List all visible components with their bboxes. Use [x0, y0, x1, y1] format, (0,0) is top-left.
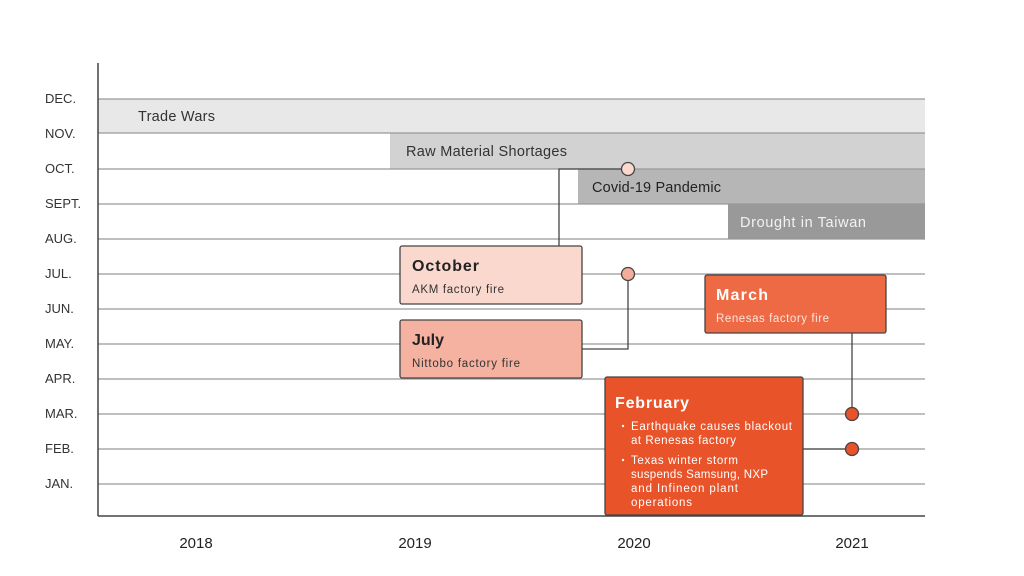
callout: March: Renesas factory fire [716, 313, 829, 325]
callout: February: operations [631, 497, 692, 509]
callout: July: July [412, 332, 444, 349]
bar: Drought in Taiwan: Drought in Taiwan [740, 215, 866, 231]
month axis labels: MAY. [45, 336, 74, 351]
year labels: 2020 [617, 535, 651, 552]
callout: October: October [412, 258, 479, 275]
marker: February [846, 442, 858, 456]
month axis labels: AUG. [45, 231, 77, 246]
connector: March [851, 333, 853, 414]
month axis labels: MAR. [45, 406, 78, 421]
marker: October [622, 162, 634, 176]
month axis labels [45, 91, 81, 491]
bar: Trade Wars [98, 99, 925, 133]
callout: March: March [716, 287, 768, 304]
month axis labels: FEB. [45, 441, 74, 456]
connector: February [803, 448, 852, 450]
month axis labels: JUL. [45, 266, 72, 281]
callout: February: Texas winter storm [631, 455, 738, 467]
callout: February: suspends Samsung, NXP [631, 469, 768, 481]
callout: February: and Infineon plant [631, 483, 739, 495]
year labels: 2021 [835, 535, 869, 552]
axes [98, 63, 925, 516]
connector: July [582, 274, 628, 349]
bar: Raw Material Shortages [390, 133, 925, 169]
bar: Raw Material Shortages: Raw Material Shortages [406, 144, 567, 160]
marker: July [622, 268, 634, 280]
callout: February: at Renesas factory [631, 435, 736, 447]
marker: March [846, 408, 858, 420]
bar: Drought in Taiwan [728, 204, 925, 239]
callout: October: AKM factory fire [412, 284, 504, 296]
callout: March [705, 275, 886, 333]
month axis labels: APR. [45, 371, 75, 386]
callout: February [605, 377, 803, 515]
bar: Trade Wars: Trade Wars [138, 109, 215, 125]
callout: February: February [615, 395, 689, 412]
connector: October [559, 169, 628, 246]
month axis labels: SEPT. [45, 196, 81, 211]
month axis labels: JUN. [45, 301, 74, 316]
callout: July [400, 320, 582, 378]
month axis labels: JAN. [45, 476, 73, 491]
bar: Covid-19 Pandemic: Covid-19 Pandemic [592, 180, 721, 196]
year labels: 2018 [179, 535, 213, 552]
month axis labels: NOV. [45, 126, 76, 141]
bar: Covid-19 Pandemic [578, 169, 925, 204]
callout: October [400, 246, 582, 304]
callout: February: Earthquake causes blackout [631, 421, 793, 433]
callout: July: Nittobo factory fire [412, 358, 520, 370]
year labels [179, 535, 869, 552]
year labels: 2019 [398, 535, 432, 552]
month axis labels: DEC. [45, 91, 76, 106]
month axis labels: OCT. [45, 161, 75, 176]
